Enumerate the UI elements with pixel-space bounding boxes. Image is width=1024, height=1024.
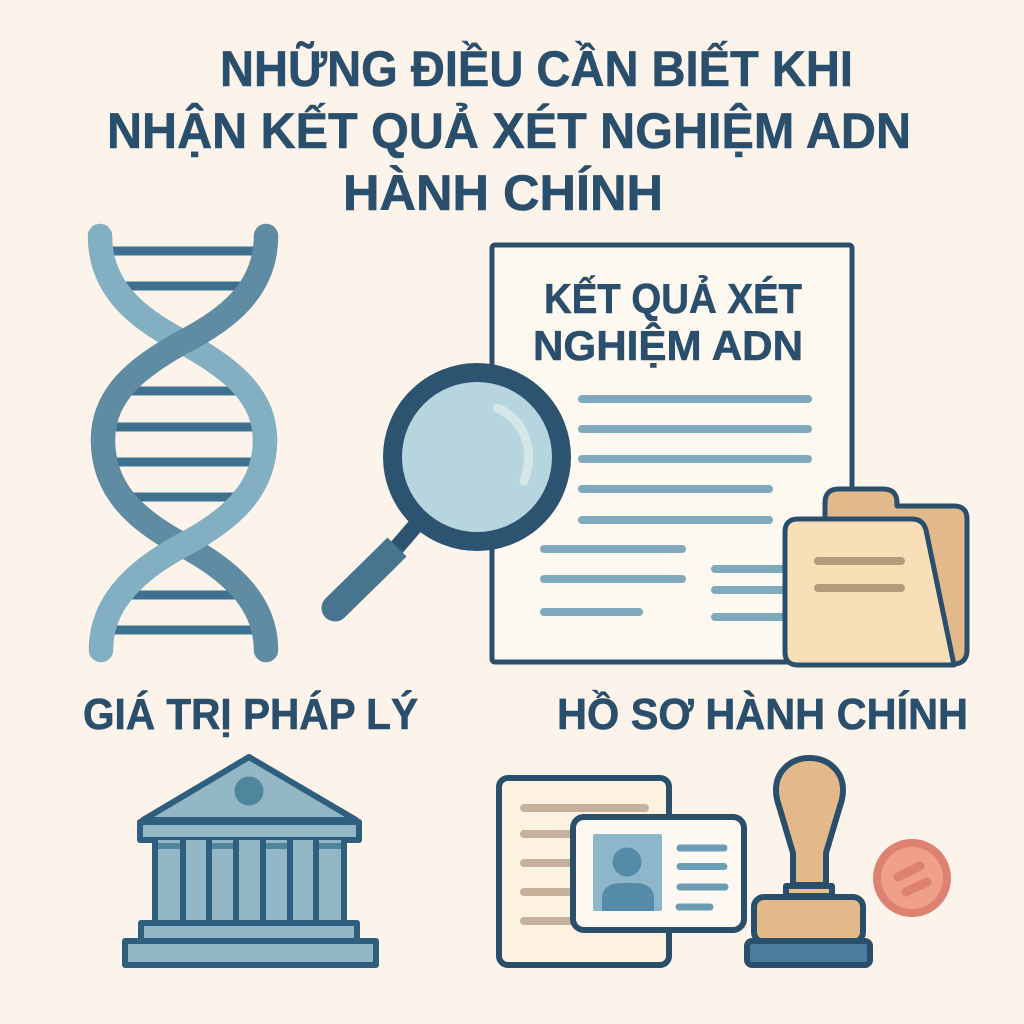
lens highlight xyxy=(497,408,529,481)
icon: DNA double helix xyxy=(100,236,266,650)
icon: red seal xyxy=(873,839,951,917)
pediment medallion xyxy=(234,776,264,806)
ID photo xyxy=(593,834,662,911)
title: HÀNH CHÍNH xyxy=(343,165,663,221)
panel: test result document xyxy=(492,245,852,662)
document text lines xyxy=(544,399,808,617)
icon: paper form xyxy=(499,778,669,965)
folder label lines xyxy=(818,561,901,588)
icon: courthouse xyxy=(125,757,376,965)
icon: ID card xyxy=(573,817,744,930)
title xyxy=(107,40,911,221)
icon: magnifying glass xyxy=(335,372,562,608)
title: NHẬN KẾT QUẢ XÉT NGHIỆM ADN xyxy=(107,103,911,159)
colonnade xyxy=(155,840,344,922)
heading: legal value: GIÁ TRỊ PHÁP LÝ xyxy=(83,689,418,739)
icon: folder xyxy=(785,489,967,665)
document heading xyxy=(533,274,803,369)
heading: administrative records: HỒ SƠ HÀNH CHÍNH xyxy=(557,689,968,739)
title: NHỮNG ĐIỀU CẦN BIẾT KHI xyxy=(220,40,853,97)
document heading: NGHIỆM ADN xyxy=(533,321,803,369)
icon: rubber stamp xyxy=(747,758,870,965)
document heading: KẾT QUẢ XÉT xyxy=(544,274,802,322)
